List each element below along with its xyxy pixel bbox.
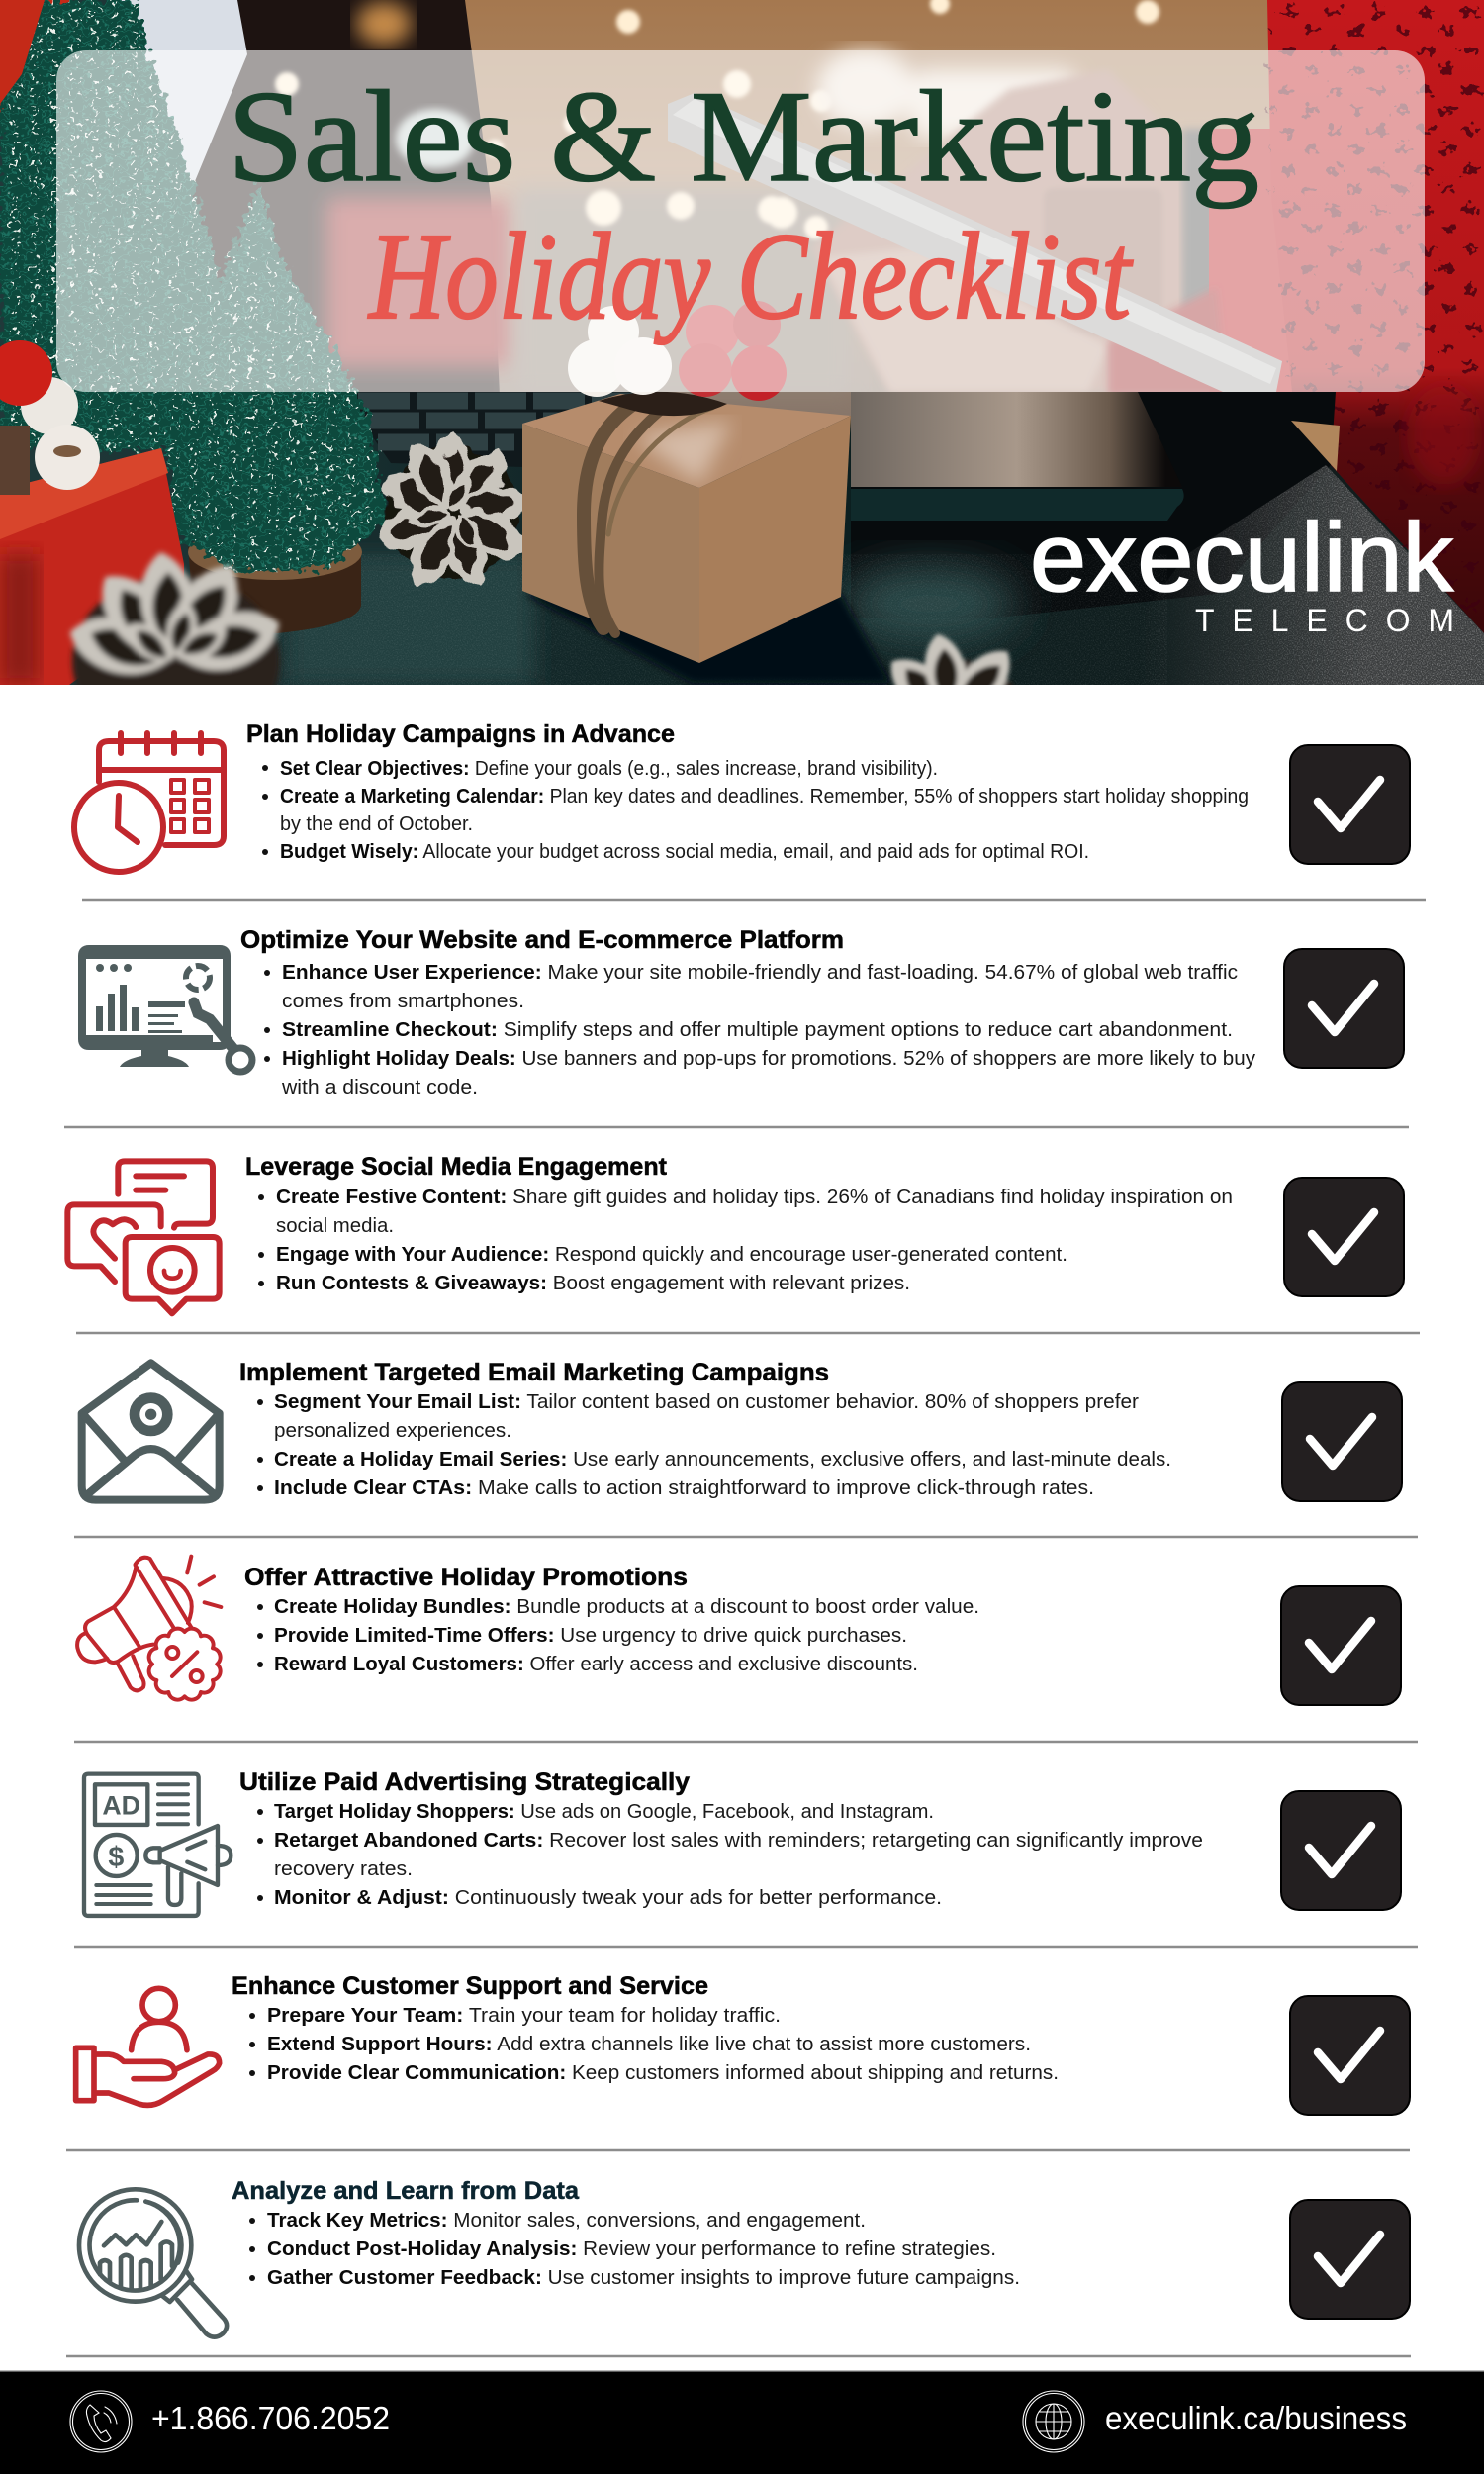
icon: open envelope xyxy=(82,1363,220,1500)
bullet list xyxy=(262,758,1249,863)
bullet list: by the end of October. xyxy=(280,813,473,835)
ornaments xyxy=(0,340,100,495)
icon: calendar and clock xyxy=(74,733,224,872)
checkbox xyxy=(1284,949,1404,1068)
bullet list: Prepare Your Team: Train your team for holiday traffic. xyxy=(267,2005,781,2027)
heading: Offer Attractive Holiday Promotions xyxy=(244,1564,688,1591)
icon: ad document with megaphone: AD xyxy=(102,1790,140,1820)
tablet xyxy=(851,392,1182,487)
red sleeve xyxy=(1209,129,1292,392)
bullet list: Create Holiday Bundles: Bundle products at a discount to boost order value. xyxy=(274,1596,979,1618)
icon: globe xyxy=(1023,2391,1084,2452)
logo: execulink telecom: TELECOM xyxy=(1195,603,1454,638)
bullet list: Engage with Your Audience: Respond quickly and encourage user-generated content. xyxy=(276,1244,1067,1266)
checkbox xyxy=(1284,1178,1404,1296)
bullet list: Gather Customer Feedback: Use customer insights to improve future campaigns. xyxy=(267,2267,1020,2289)
table background xyxy=(0,0,1484,685)
logo: execulink telecom: execulink xyxy=(1030,503,1454,612)
bullet list: Conduct Post-Holiday Analysis: Review your performance to refine strategies. xyxy=(267,2238,996,2260)
item 4: email xyxy=(82,1359,1402,1501)
dark shadow area xyxy=(851,392,1336,618)
pinecone bottom xyxy=(63,548,289,747)
tree left back xyxy=(0,0,232,455)
checkbox xyxy=(1281,1791,1401,1910)
bullet list: comes from smartphones. xyxy=(282,991,524,1012)
pale fabric top left xyxy=(121,0,247,180)
heading: Enhance Customer Support and Service xyxy=(232,1972,708,2000)
phone number: +1.866.706.2052 xyxy=(151,2400,390,2436)
bullet list: Monitor & Adjust: Continuously tweak your ads for better performance. xyxy=(274,1887,942,1909)
subtitle: Holiday Checklist: Holiday Checklist xyxy=(367,209,1134,345)
red knit sweater xyxy=(1267,0,1484,633)
icon: monitor and wrench xyxy=(82,949,252,1072)
bullet list xyxy=(257,1596,979,1675)
bullet list: Run Contests & Giveaways: Boost engagement with relevant prizes. xyxy=(276,1273,910,1294)
icon: ad document with megaphone: $ xyxy=(108,1842,124,1873)
berries xyxy=(568,301,787,401)
item 6: paid advertising xyxy=(84,1768,1401,1916)
checkbox xyxy=(1290,1996,1410,2115)
checkbox xyxy=(1290,745,1410,864)
blurred ornament xyxy=(396,109,475,168)
item 7: customer support xyxy=(76,1972,1410,2115)
bullet list: Create a Holiday Email Series: Use early announcements, exclusive offers, and last-minute deals. xyxy=(274,1449,1171,1471)
bullet list xyxy=(249,2005,1059,2084)
bullet list xyxy=(249,2210,1020,2289)
bullet list: Segment Your Email List: Tailor content based on customer behavior. 80% of shoppers prefer xyxy=(274,1391,1139,1413)
laptop screen xyxy=(188,0,500,396)
bullet list: Enhance User Experience: Make your site mobile-friendly and fast-loading. 54.67% of global web traffic xyxy=(282,962,1238,984)
heading: Leverage Social Media Engagement xyxy=(245,1153,668,1181)
bokeh lights xyxy=(275,0,1159,239)
bullet list: Create Festive Content: Share gift guides and holiday tips. 26% of Canadians find holiday inspiration on xyxy=(276,1187,1233,1208)
red gift box left xyxy=(0,448,184,685)
phone xyxy=(668,93,1282,392)
icon: magnifier with chart xyxy=(79,2189,227,2337)
bullet list xyxy=(257,1801,1203,1909)
bullet list: Track Key Metrics: Monitor sales, conversions, and engagement. xyxy=(267,2210,866,2232)
lamp glow xyxy=(356,2,412,46)
bullet list: recovery rates. xyxy=(274,1858,413,1880)
item 5: promotions xyxy=(77,1557,1401,1705)
title: Sales & Marketing: Sales & Marketing xyxy=(228,63,1259,209)
blurred string lights area xyxy=(516,190,841,344)
heading: Optimize Your Website and E-commerce Platform xyxy=(240,926,844,954)
heading: Plan Holiday Campaigns in Advance xyxy=(246,720,675,748)
item 3: social media xyxy=(67,1153,1404,1313)
bullet list: Target Holiday Shoppers: Use ads on Google, Facebook, and Instagram. xyxy=(274,1801,934,1823)
bullet list: Set Clear Objectives: Define your goals (e.g., sales increase, brand visibility). xyxy=(280,758,938,780)
bullet list xyxy=(258,1187,1233,1294)
hero photo banner xyxy=(0,0,1484,685)
twine xyxy=(584,398,712,633)
pinecone middle xyxy=(371,433,535,597)
keyboard xyxy=(357,392,634,467)
bullet list xyxy=(257,1391,1171,1499)
blurred red gift behind xyxy=(326,198,514,366)
checkbox xyxy=(1282,1382,1402,1501)
item 1: plan holiday campaigns xyxy=(74,720,1410,872)
hand xyxy=(815,75,1161,392)
kraft gift box xyxy=(522,392,851,663)
icon: phone xyxy=(70,2391,132,2452)
bullet list: Provide Limited-Time Offers: Use urgency to drive quick purchases. xyxy=(274,1625,907,1647)
bullet list: Streamline Checkout: Simplify steps and offer multiple payment options to reduce cart abandonment. xyxy=(282,1019,1233,1041)
shadow beside hand xyxy=(1179,126,1217,305)
footer bar xyxy=(0,2370,1484,2474)
wire bow xyxy=(599,392,727,416)
icon: megaphone with percent badge xyxy=(77,1557,221,1700)
red cloth accent xyxy=(0,0,45,104)
pinecone right xyxy=(880,630,1023,770)
bullet list: Retarget Abandoned Carts: Recover lost sales with reminders; retargeting can significantly improve xyxy=(274,1830,1203,1852)
bullet list: Reward Loyal Customers: Offer early access and exclusive discounts. xyxy=(274,1654,918,1675)
tablet edge xyxy=(851,489,1184,521)
icon: hand holding person xyxy=(76,1988,220,2105)
item 2: optimize website xyxy=(82,926,1404,1098)
teal table left and centre highlights xyxy=(277,554,1167,685)
bullet list: Create a Marketing Calendar: Plan key dates and deadlines. Remember, 55% of shoppers start holiday shopping xyxy=(280,786,1249,808)
bullet list: Extend Support Hours: Add extra channels like live chat to assist more customers. xyxy=(267,2034,1031,2055)
icon: ad document with megaphone xyxy=(84,1774,231,1916)
wooden block xyxy=(1291,421,1340,471)
bullet list xyxy=(264,962,1255,1098)
website: execulink.ca/business xyxy=(1105,2400,1407,2436)
bullet list: personalized experiences. xyxy=(274,1420,511,1442)
heading: Analyze and Learn from Data xyxy=(232,2177,580,2205)
kraft box shadow xyxy=(524,594,890,683)
heading: Implement Targeted Email Marketing Campaigns xyxy=(239,1359,829,1386)
icon: chat bubbles xyxy=(67,1161,220,1313)
tree centre xyxy=(163,183,388,574)
bullet list: Provide Clear Communication: Keep customers informed about shipping and returns. xyxy=(267,2062,1059,2084)
tree stump xyxy=(188,542,362,633)
bullet list: Budget Wisely: Allocate your budget across social media, email, and paid ads for optimal ROI. xyxy=(280,841,1089,863)
item 8: analyze data xyxy=(79,2177,1410,2337)
checkbox xyxy=(1281,1586,1401,1705)
bullet list: social media. xyxy=(276,1215,394,1237)
heading: Utilize Paid Advertising Strategically xyxy=(239,1768,690,1796)
grey speckled table xyxy=(1158,465,1484,685)
translucent title panel xyxy=(56,50,1425,392)
bullet list: Include Clear CTAs: Make calls to action straightforward to improve click-through rates. xyxy=(274,1477,1094,1499)
warm wall backdrop xyxy=(455,0,1286,416)
white mug xyxy=(816,49,1078,139)
checkbox xyxy=(1290,2200,1410,2319)
red cloth top left xyxy=(0,0,69,119)
bullet list: with a discount code. xyxy=(281,1077,478,1098)
bullet list: Highlight Holiday Deals: Use banners and pop-ups for promotions. 52% of shoppers are more likely to buy xyxy=(282,1048,1255,1070)
